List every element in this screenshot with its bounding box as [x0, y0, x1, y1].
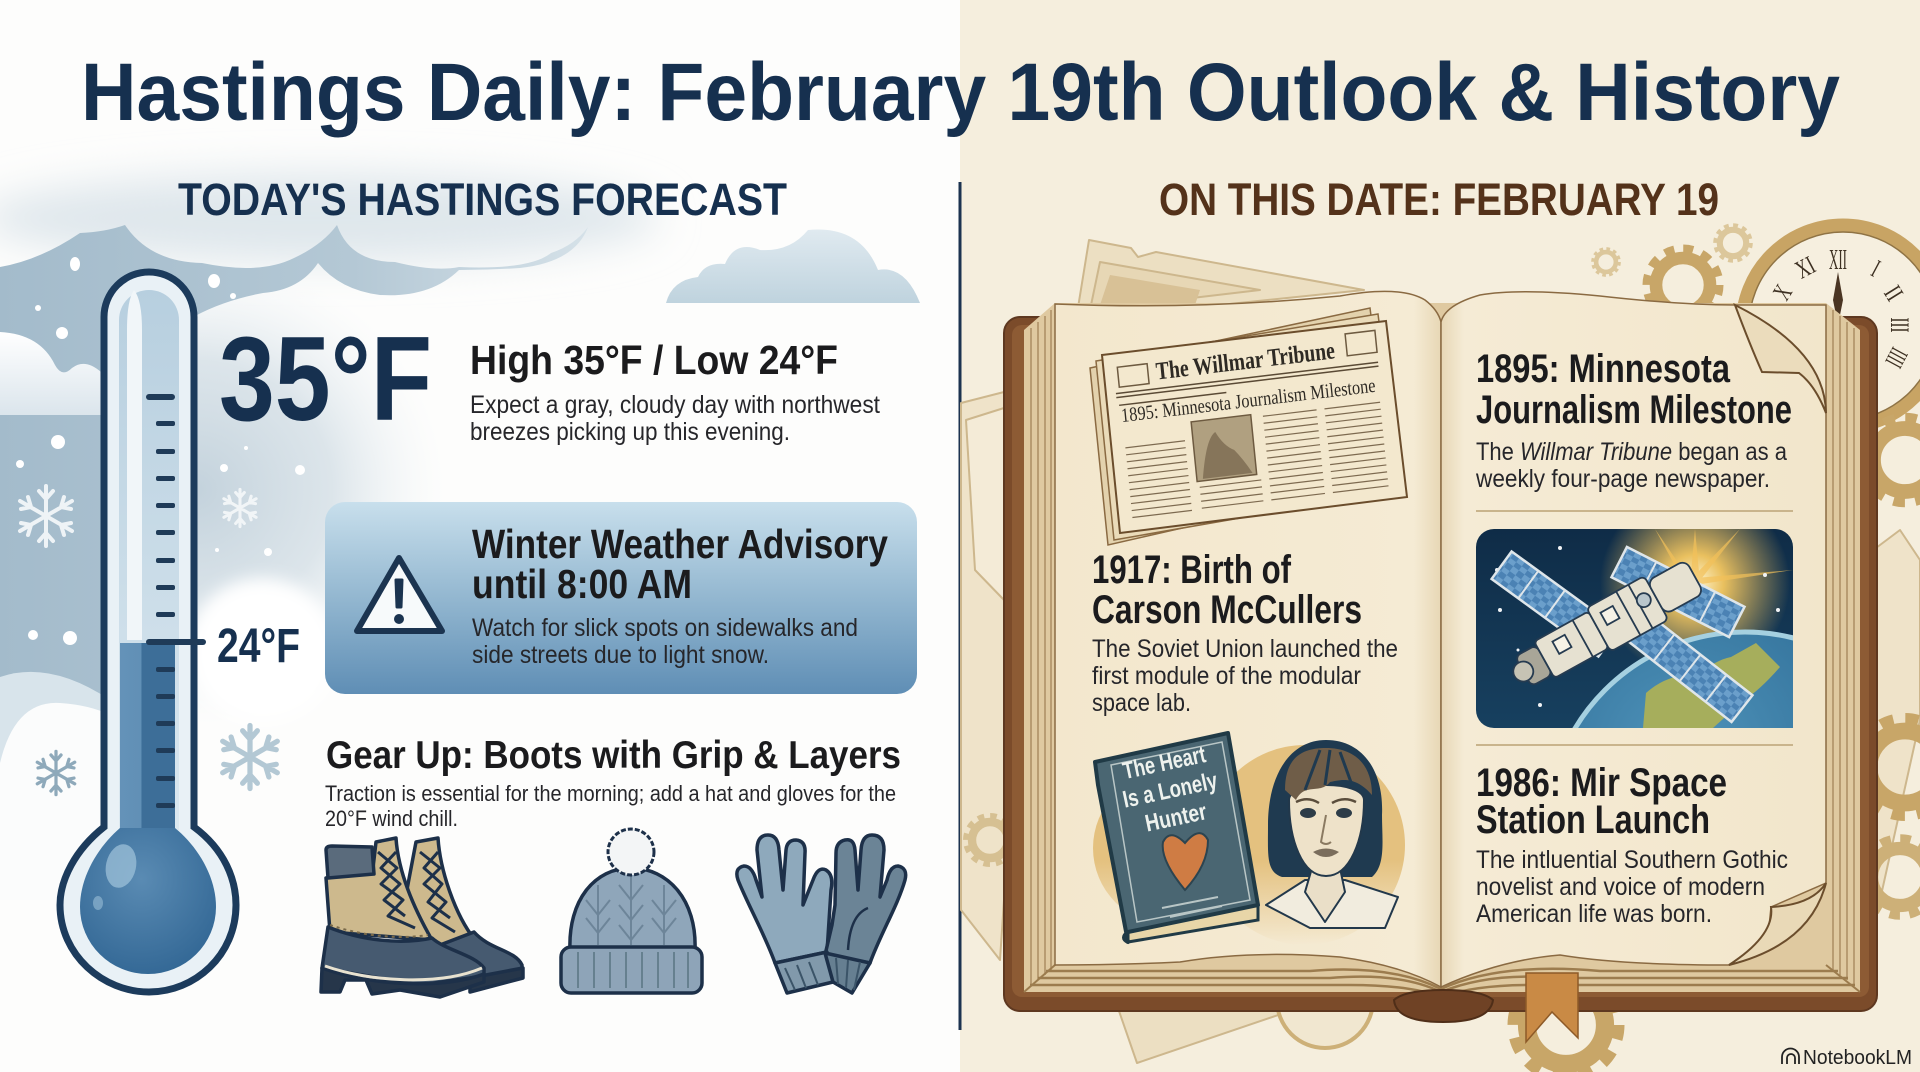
text block: high and low: High 35°F / Low 24°F — [470, 337, 838, 383]
text block: 1986 — [1476, 761, 1788, 928]
illustration: Mir space station — [1476, 488, 1920, 1028]
newspaper headline: 1895: Minnesota Journalism Milestone — [1120, 375, 1377, 427]
illustration: clock: X — [1767, 279, 1798, 305]
text block: 1917 — [1092, 548, 1398, 717]
illustration: gears — [966, 225, 1920, 1072]
bookmark — [1526, 973, 1578, 1042]
text block: 1986: 1986: Mir Space — [1476, 761, 1727, 805]
illustration: portrait of Carson McCullers — [1266, 740, 1398, 928]
illustration: small cloud — [666, 230, 920, 303]
text block: 1895: weekly four-page newspaper. — [1475, 465, 1770, 493]
divider — [958, 182, 962, 1030]
illustration: clock: XII — [1829, 245, 1847, 276]
text block: 1917: first module of the modular — [1092, 662, 1361, 690]
page curl top — [1735, 305, 1826, 413]
title: Hastings Daily: February 19th Outlook & History — [81, 47, 1840, 138]
text block: 1895: 1895: Minnesota — [1476, 347, 1731, 391]
text block: 1917: 1917: Birth of — [1092, 548, 1292, 592]
advisory text: until 8:00 AM — [472, 561, 692, 607]
text block: 1917: Carson McCullers — [1092, 588, 1362, 632]
heading: forecast: TODAY'S HASTINGS FORECAST — [178, 174, 787, 225]
book cover — [1004, 317, 1877, 1011]
illustration: gold backdrop — [1093, 745, 1405, 945]
chart: thermometer — [60, 272, 236, 992]
text block: 1895: The Willmar Tribune began as a — [1476, 438, 1787, 466]
advisory text: Winter Weather Advisory — [472, 521, 888, 567]
text block: 1986: American life was born. — [1476, 900, 1712, 928]
illustration: clock: III — [1885, 318, 1914, 332]
advisory text: Watch for slick spots on sidewalks and — [472, 614, 858, 642]
text block: gear up: Traction is essential for the morning; add a hat and gloves for the — [325, 781, 896, 806]
text block: 1895: Journalism Milestone — [1476, 388, 1792, 432]
illustration: novel cover — [1095, 733, 1258, 942]
novel title: Is a Lonely — [1120, 767, 1220, 814]
icon: white snowflake left — [20, 486, 72, 546]
page stack — [1024, 303, 1860, 997]
text block: gear up — [325, 734, 901, 831]
text block: high and low — [470, 337, 880, 446]
panel: forecast background — [0, 0, 960, 1072]
icon: grey snowflake lower left — [37, 751, 75, 795]
illustration: clock: IIII — [1880, 343, 1914, 373]
icon: knit hat — [561, 829, 702, 993]
illustration: background papers — [961, 240, 1920, 1063]
icon: boots — [321, 838, 523, 997]
text block: high and low: Expect a gray, cloudy day with northwest — [470, 391, 880, 419]
illustration: open book — [1004, 291, 1877, 1042]
illustration: clock: II — [1878, 280, 1909, 306]
icon: white snowflake small — [224, 489, 256, 527]
text block: gear up: 20°F wind chill. — [325, 806, 458, 831]
illustration: clock: XI — [1790, 250, 1820, 284]
watermark: NotebookLM: NotebookLM — [1803, 1047, 1912, 1069]
illustration: clock — [1742, 225, 1920, 427]
text block: 1986: novelist and voice of modern — [1476, 873, 1765, 901]
text block: 1986: Station Launch — [1476, 798, 1710, 842]
heading: history: ON THIS DATE: FEBRUARY 19 — [1159, 174, 1719, 225]
text block: gear up: Gear Up: Boots with Grip & Layers — [326, 734, 901, 777]
novel title — [1115, 740, 1226, 841]
spine bump — [1394, 990, 1493, 1022]
illustration: storm clouds and snow — [0, 225, 588, 900]
text block: 1917: The Soviet Union launched the — [1092, 635, 1398, 663]
low temperature label: 24°F — [217, 620, 300, 673]
panel: winter weather advisory — [325, 502, 917, 694]
text block: 1986: The intluential Southern Gothic — [1476, 846, 1788, 874]
novel title: Hunter — [1143, 798, 1209, 838]
icon: grey snowflake lower right — [223, 726, 277, 788]
illustration: clock: I — [1867, 254, 1885, 282]
advisory text: side streets due to light snow. — [472, 641, 769, 669]
right page — [1441, 292, 1826, 987]
text block: 1917: space lab. — [1092, 689, 1191, 717]
text block: high and low: breezes picking up this evening. — [470, 418, 790, 446]
novel title: The Heart — [1120, 741, 1208, 785]
illustration: newspaper — [1090, 308, 1407, 545]
panel: history background — [960, 0, 1920, 1072]
page curl bottom — [1729, 883, 1826, 965]
left page — [1055, 291, 1441, 987]
big temperature: 35°F — [219, 312, 432, 446]
text block: 1895 — [1475, 347, 1792, 493]
advisory text — [472, 521, 888, 669]
icon: warning triangle — [357, 558, 442, 631]
newspaper masthead: The Willmar Tribune — [1155, 337, 1336, 386]
icon: gloves — [737, 835, 906, 993]
